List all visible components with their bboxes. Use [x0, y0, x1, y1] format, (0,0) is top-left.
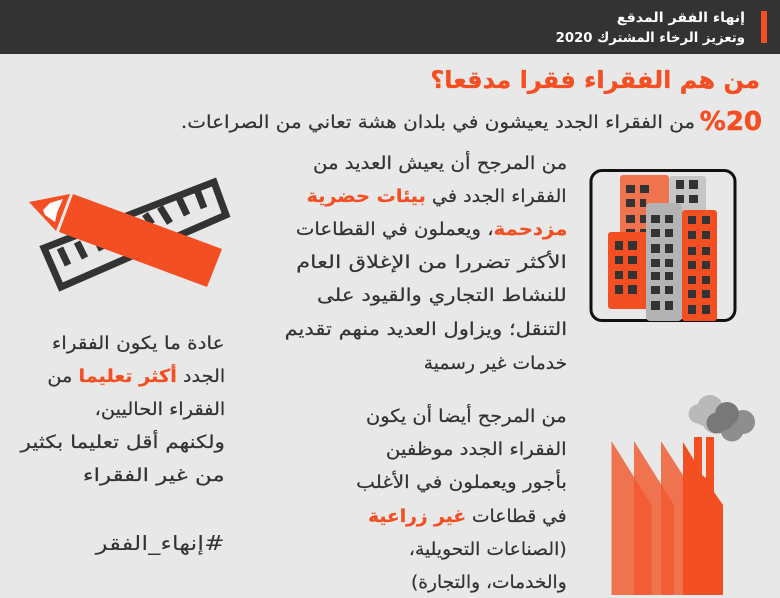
- text block: education: الجدد أكثر تعليما من: [47, 366, 225, 387]
- hashtag: #إنهاء_الفقر: [96, 531, 225, 555]
- text block: urban poor: الفقراء الجدد في بيئات حضرية: [307, 186, 567, 207]
- text block: education: الفقراء الحاليين،: [94, 399, 225, 420]
- text block: education: ولكنهم أقل تعليما بكثير: [21, 432, 225, 453]
- text block: wage workers: [356, 404, 567, 593]
- text block: wage workers: بأجور ويعملون في الأغلب: [356, 472, 567, 493]
- text block: education: [20, 333, 225, 486]
- text block: urban poor: خدمات غير رسمية: [424, 353, 567, 374]
- header title: إنهاء الفقر المدقع: [617, 10, 745, 26]
- text block: education: عادة ما يكون الفقراء: [52, 333, 225, 354]
- statistic figure: %20: [700, 107, 762, 137]
- text block: wage workers: والخدمات، والتجارة): [411, 572, 567, 593]
- text block: education: من غير الفقراء: [83, 465, 225, 486]
- header title: [556, 10, 745, 46]
- text block: urban poor: [284, 150, 567, 374]
- text block: wage workers: من المرجح أيضا أن يكون: [366, 406, 567, 427]
- header band: [0, 0, 780, 54]
- header title: وتعزيز الرخاء المشترك 2020: [556, 30, 745, 46]
- text block: urban poor: للنشاط التجاري والقيود على: [317, 285, 567, 306]
- header accent bar: [761, 11, 767, 43]
- text block: wage workers: في قطاعات غير زراعية: [368, 506, 567, 527]
- statistic sentence: من الفقراء الجدد يعيشون في بلدان هشة تعاني من الصراعات.: [181, 112, 695, 133]
- text block: urban poor: مزدحمة، ويعملون في القطاعات: [295, 219, 567, 240]
- text block: urban poor: من المرجح أن يعيش العديد من: [313, 153, 567, 174]
- key statistic line: [181, 107, 762, 137]
- text block: urban poor: الأكثر تضررا من الإغلاق العام: [296, 252, 567, 273]
- heading: من هم الفقراء فقرا مدقعا؟: [430, 66, 760, 94]
- text block: urban poor: التنقل؛ ويزاول العديد منهم تقديم: [284, 319, 567, 340]
- text block: wage workers: الفقراء الجدد موظفين: [386, 439, 567, 460]
- text block: wage workers: (الصناعات التحويلية،: [409, 539, 567, 560]
